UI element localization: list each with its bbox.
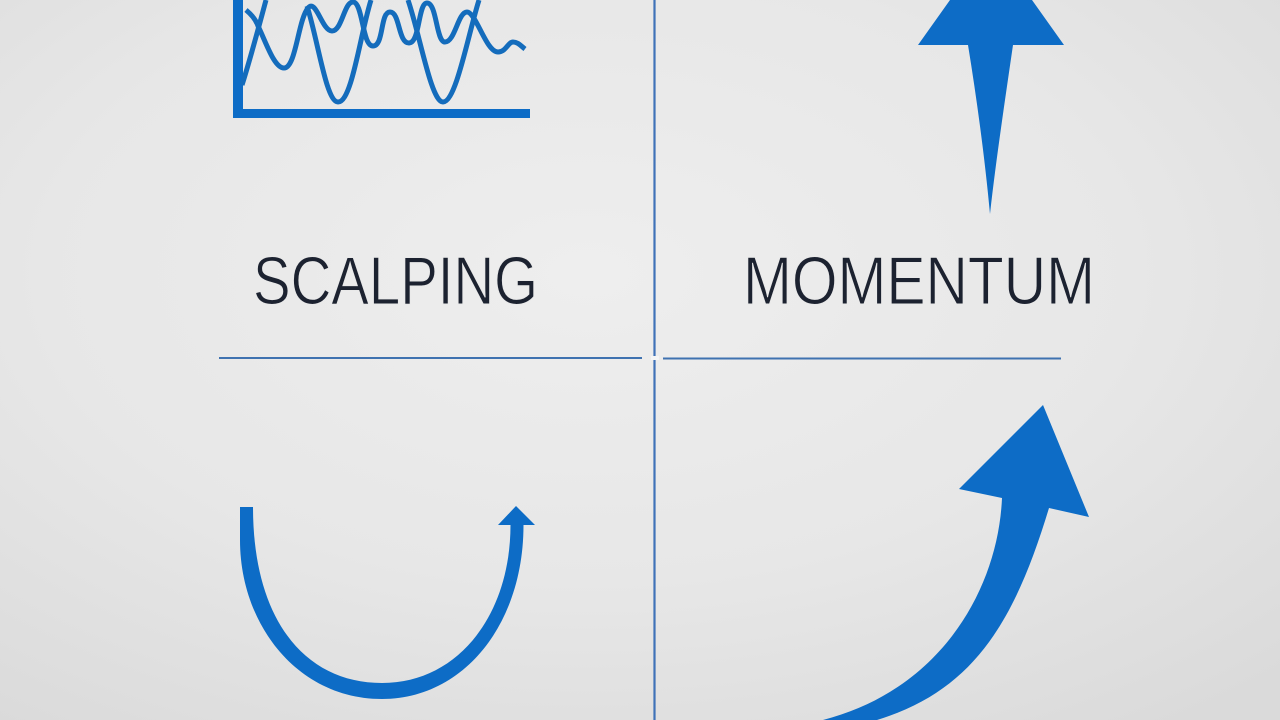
icon: swooping growth arrow (823, 405, 1089, 720)
label: scalping: SCALPING (253, 243, 538, 319)
icon: curved U-turn arrow (240, 506, 535, 699)
icon: momentum upward arrow (918, 0, 1064, 214)
label: momentum: MOMENTUM (743, 243, 1095, 319)
icon: scalping oscillating line chart (233, 0, 530, 118)
